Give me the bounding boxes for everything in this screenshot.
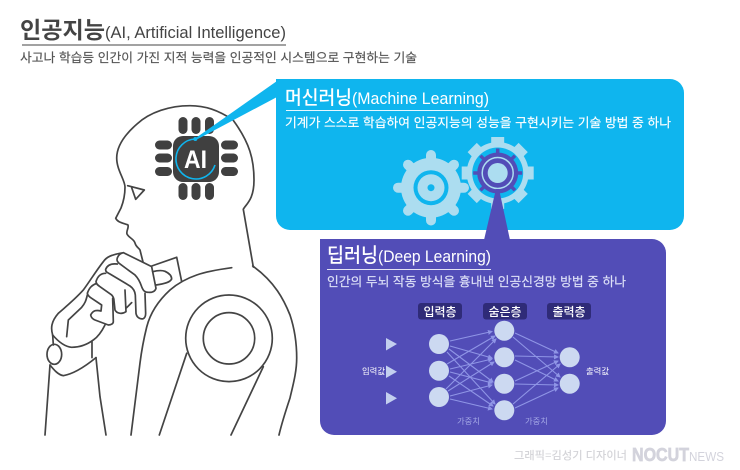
title xyxy=(20,17,286,46)
pointer from deep learning panel to gear xyxy=(484,189,510,240)
credit line xyxy=(514,445,724,465)
deep learning description: 인간의 두뇌 작동 방식을 흉내낸 인공신경망 방법 중 하나 xyxy=(327,275,626,289)
layer labels xyxy=(418,303,591,320)
weight labels: 가중치 xyxy=(525,417,548,426)
layer labels: 출력층 xyxy=(552,305,586,319)
shoulder xyxy=(131,268,232,435)
neural network diagram xyxy=(362,303,610,426)
head outline xyxy=(116,106,254,267)
hand xyxy=(45,253,172,435)
icon: AI chip: AI xyxy=(184,146,207,174)
eye xyxy=(128,186,144,199)
panel: machine learning xyxy=(276,79,684,230)
input arrows xyxy=(386,338,397,404)
output value label: 출력값 xyxy=(586,366,610,376)
icon: right gear xyxy=(462,137,534,209)
layer labels: 입력층 xyxy=(423,305,457,319)
subtitle: 사고나 학습등 인간이 가진 지적 능력을 인공적인 시스템으로 구현하는 기술 xyxy=(20,51,417,65)
collar xyxy=(152,257,182,282)
arm circle xyxy=(186,295,272,382)
connections xyxy=(446,332,560,409)
heading: deep learning xyxy=(327,244,491,270)
icon: left gear xyxy=(398,155,464,220)
machine learning description: 기계가 스스로 학습하여 인공지능의 성능을 구현시키는 기술 방법 중 하나 xyxy=(285,116,672,130)
credit line: NOCUT xyxy=(632,445,689,465)
beam from chip to machine learning panel xyxy=(195,81,277,140)
layer labels: 숨은층 xyxy=(488,305,522,319)
panel: deep learning xyxy=(320,239,666,435)
credit line: 그래픽=김성기 디자이너 xyxy=(514,449,627,462)
input value label: 입력값 xyxy=(362,366,386,376)
credit line: NEWS xyxy=(689,449,724,464)
weight labels: 가중치 xyxy=(457,417,480,426)
body back xyxy=(253,266,297,435)
upper arm lines xyxy=(159,353,263,435)
title: 인공지능 xyxy=(20,17,105,43)
heading: machine learning xyxy=(285,87,489,111)
heading: machine learning: (Machine Learning) xyxy=(352,90,489,108)
illustration: thinking person xyxy=(45,106,297,435)
weight labels xyxy=(457,417,548,426)
heading: deep learning: (Deep Learning) xyxy=(378,248,491,266)
heading: deep learning: 딥러닝 xyxy=(327,244,378,267)
heading: machine learning: 머신러닝 xyxy=(285,87,352,109)
icon: AI chip xyxy=(155,117,238,200)
nodes xyxy=(429,321,580,420)
title: (AI, Artificial Intelligence) xyxy=(105,24,286,42)
